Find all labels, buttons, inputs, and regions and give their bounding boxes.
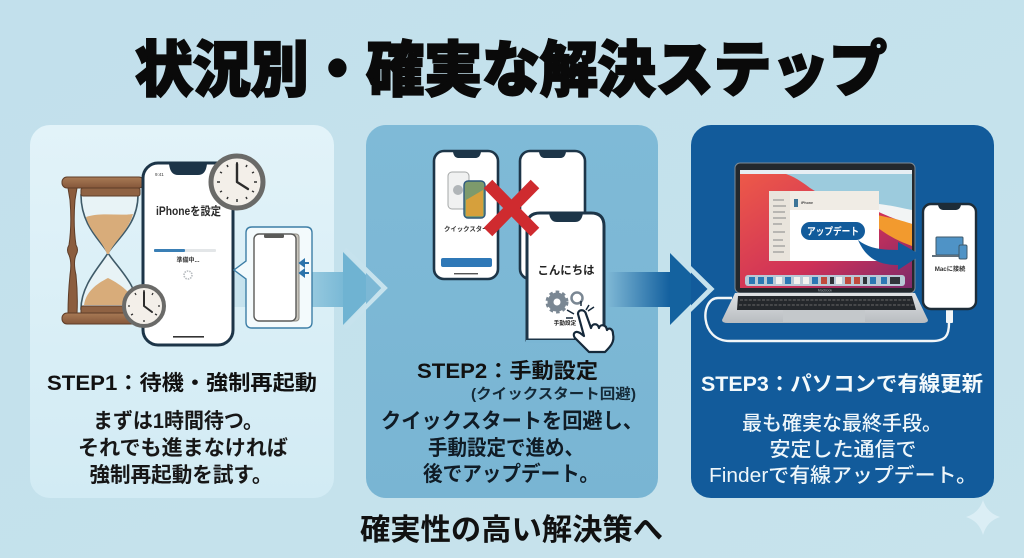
icon: laptop base bbox=[722, 293, 928, 323]
icon: manual setup phone bbox=[526, 213, 606, 343]
step 1 description: 強制再起動を試す。 bbox=[90, 464, 272, 487]
icon: connected phone bbox=[923, 204, 976, 323]
icon: small clock bbox=[124, 286, 164, 326]
arrow: step 2 to step 3 bbox=[607, 253, 706, 325]
panel: step 1 bbox=[30, 125, 379, 498]
icon: quick start phone: クイックスター bbox=[444, 224, 489, 233]
icon: iPhone setup screen: 準備中... bbox=[176, 256, 200, 264]
icon: quick start phone bbox=[434, 151, 498, 279]
icon: large clock bbox=[211, 156, 263, 208]
step 3 description: Finderで有線アップデート。 bbox=[709, 463, 977, 487]
icon: red cross bbox=[488, 184, 535, 232]
panel: step 2 bbox=[345, 125, 706, 498]
step 3 heading: STEP3：パソコンで有線更新 bbox=[701, 373, 983, 396]
update pill bbox=[801, 222, 865, 240]
icon: manual setup phone: こんにちは bbox=[538, 264, 595, 277]
step 3 description: 安定した通信で bbox=[770, 438, 916, 461]
step 2 subheading: (クイックスタート回避) bbox=[471, 385, 636, 403]
icon: hourglass bbox=[62, 177, 144, 324]
icon: iPhone setup screen: iPhoneを設定 bbox=[156, 205, 221, 218]
icon: update arrow bbox=[858, 240, 921, 270]
icon: sparkle bbox=[966, 500, 1000, 535]
icon: blank phone bbox=[520, 151, 585, 279]
icon: pointing hand bbox=[566, 301, 613, 352]
step 1 description bbox=[78, 410, 288, 487]
step 1 description: それでも進まなければ bbox=[78, 437, 288, 460]
update pill: アップデート bbox=[807, 225, 859, 238]
step 1 description: まずは1時間待つ。 bbox=[93, 410, 263, 433]
step 2 description: 手動設定で進め、 bbox=[428, 437, 584, 460]
icon: iPhone setup screen: 9:41 bbox=[155, 172, 164, 177]
icon: connected phone: Macに接続 bbox=[935, 265, 966, 273]
bottom caption: 確実性の高い解決策へ bbox=[360, 514, 663, 547]
step 3 description bbox=[709, 412, 977, 487]
step 2 description bbox=[381, 410, 643, 486]
arrow: step 1 to step 2 bbox=[233, 252, 379, 325]
icon: laptop: MacBook bbox=[818, 288, 832, 292]
step 2 description: クイックスタートを回避し、 bbox=[381, 410, 643, 433]
arrow: step 1 chevron outline bbox=[345, 249, 385, 328]
icon: manual setup phone: 手動設定 bbox=[554, 319, 577, 327]
arrow: step 2 chevron outline bbox=[672, 250, 712, 328]
icon: USB cable bbox=[705, 298, 949, 341]
finder window bbox=[769, 191, 879, 261]
step 2 heading: STEP2：手動設定 bbox=[417, 360, 598, 383]
icon: laptop bbox=[735, 163, 915, 293]
icon: side button callout bbox=[234, 227, 312, 328]
panel: step 3 bbox=[672, 125, 994, 498]
step 2 description: 後でアップデート。 bbox=[423, 462, 599, 486]
step 1 heading: STEP1：待機・強制再起動 bbox=[47, 372, 317, 395]
title: 状況別・確実な解決ステップ bbox=[135, 37, 887, 104]
icon: iPhone setup screen bbox=[143, 163, 233, 345]
dock bbox=[745, 275, 905, 286]
step 3 description: 最も確実な最終手段。 bbox=[742, 412, 942, 435]
finder window: iPhone bbox=[801, 201, 813, 205]
